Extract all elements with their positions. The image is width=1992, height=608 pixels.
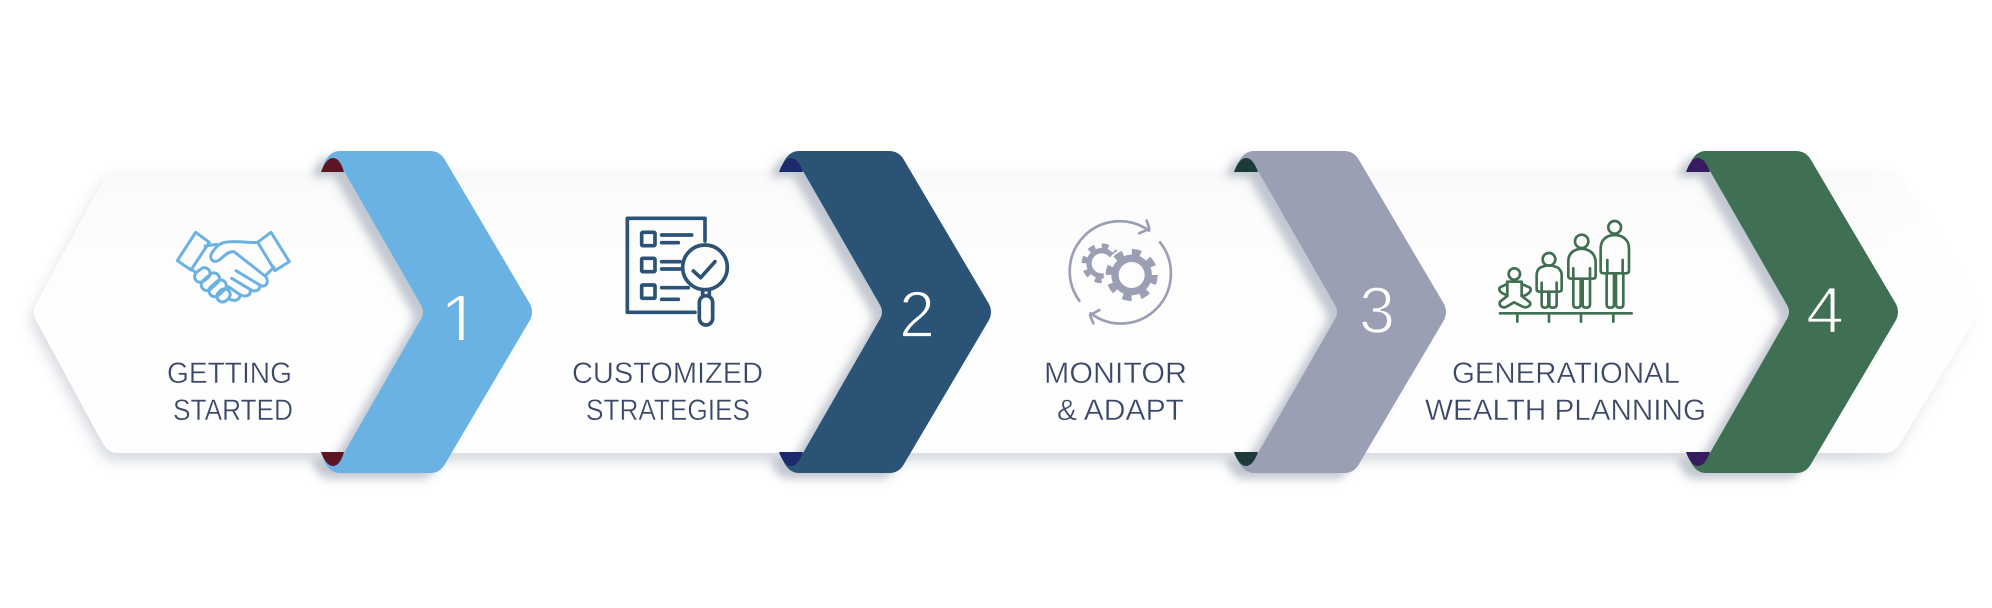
chevron 3 with number — [1234, 151, 1446, 473]
icon: handshake — [177, 232, 289, 304]
teen — [1568, 235, 1596, 308]
number 2: 2 — [899, 277, 935, 351]
adult — [1601, 221, 1629, 308]
number 4: 4 — [1806, 273, 1844, 347]
panel: hexagonal process band — [34, 171, 1976, 453]
chevron shape: navy — [781, 151, 991, 473]
label: getting started: STARTED — [173, 394, 293, 427]
label: customized strategies: STRATEGIES — [586, 394, 750, 427]
label: generational wealth planning: WEALTH PLANNING — [1425, 394, 1706, 427]
icon: generations growing family — [1499, 221, 1632, 322]
label: monitor and adapt: MONITOR — [1044, 357, 1187, 390]
chevron shape: grey — [1236, 151, 1446, 473]
label: generational wealth planning: GENERATIONAL — [1452, 357, 1680, 390]
label: getting started — [167, 357, 293, 427]
label: customized strategies — [572, 357, 763, 427]
chevron 4 with number — [1686, 151, 1898, 473]
fold: bottom navy — [779, 452, 803, 466]
fold: top maroon — [321, 158, 344, 172]
icon: checklist with magnifier — [627, 218, 727, 325]
fold: bottom dark teal — [1234, 452, 1258, 466]
label: monitor and adapt — [1044, 357, 1187, 427]
fold: bottom purple — [1686, 452, 1710, 466]
label: customized strategies: CUSTOMIZED — [572, 357, 763, 390]
chevron shape: green — [1688, 151, 1898, 473]
large gear — [1109, 252, 1154, 298]
label: monitor and adapt: & ADAPT — [1057, 394, 1184, 427]
child — [1537, 253, 1562, 308]
small gear — [1084, 246, 1119, 281]
number 1: 1 — [440, 281, 480, 361]
number 3: 3 — [1359, 273, 1395, 347]
baby — [1499, 268, 1531, 307]
chevron shape: light blue — [322, 151, 532, 473]
label: generational wealth planning — [1425, 357, 1706, 427]
chevron 1 with number — [321, 151, 532, 473]
chevron 2 with number — [779, 151, 991, 473]
icon: gears with cycle arrows — [1070, 221, 1171, 324]
label: getting started: GETTING — [167, 357, 292, 390]
fold: top navy — [779, 158, 803, 172]
fold: top dark teal — [1234, 158, 1258, 172]
fold: top purple — [1686, 158, 1710, 172]
fold: bottom maroon — [321, 452, 344, 466]
